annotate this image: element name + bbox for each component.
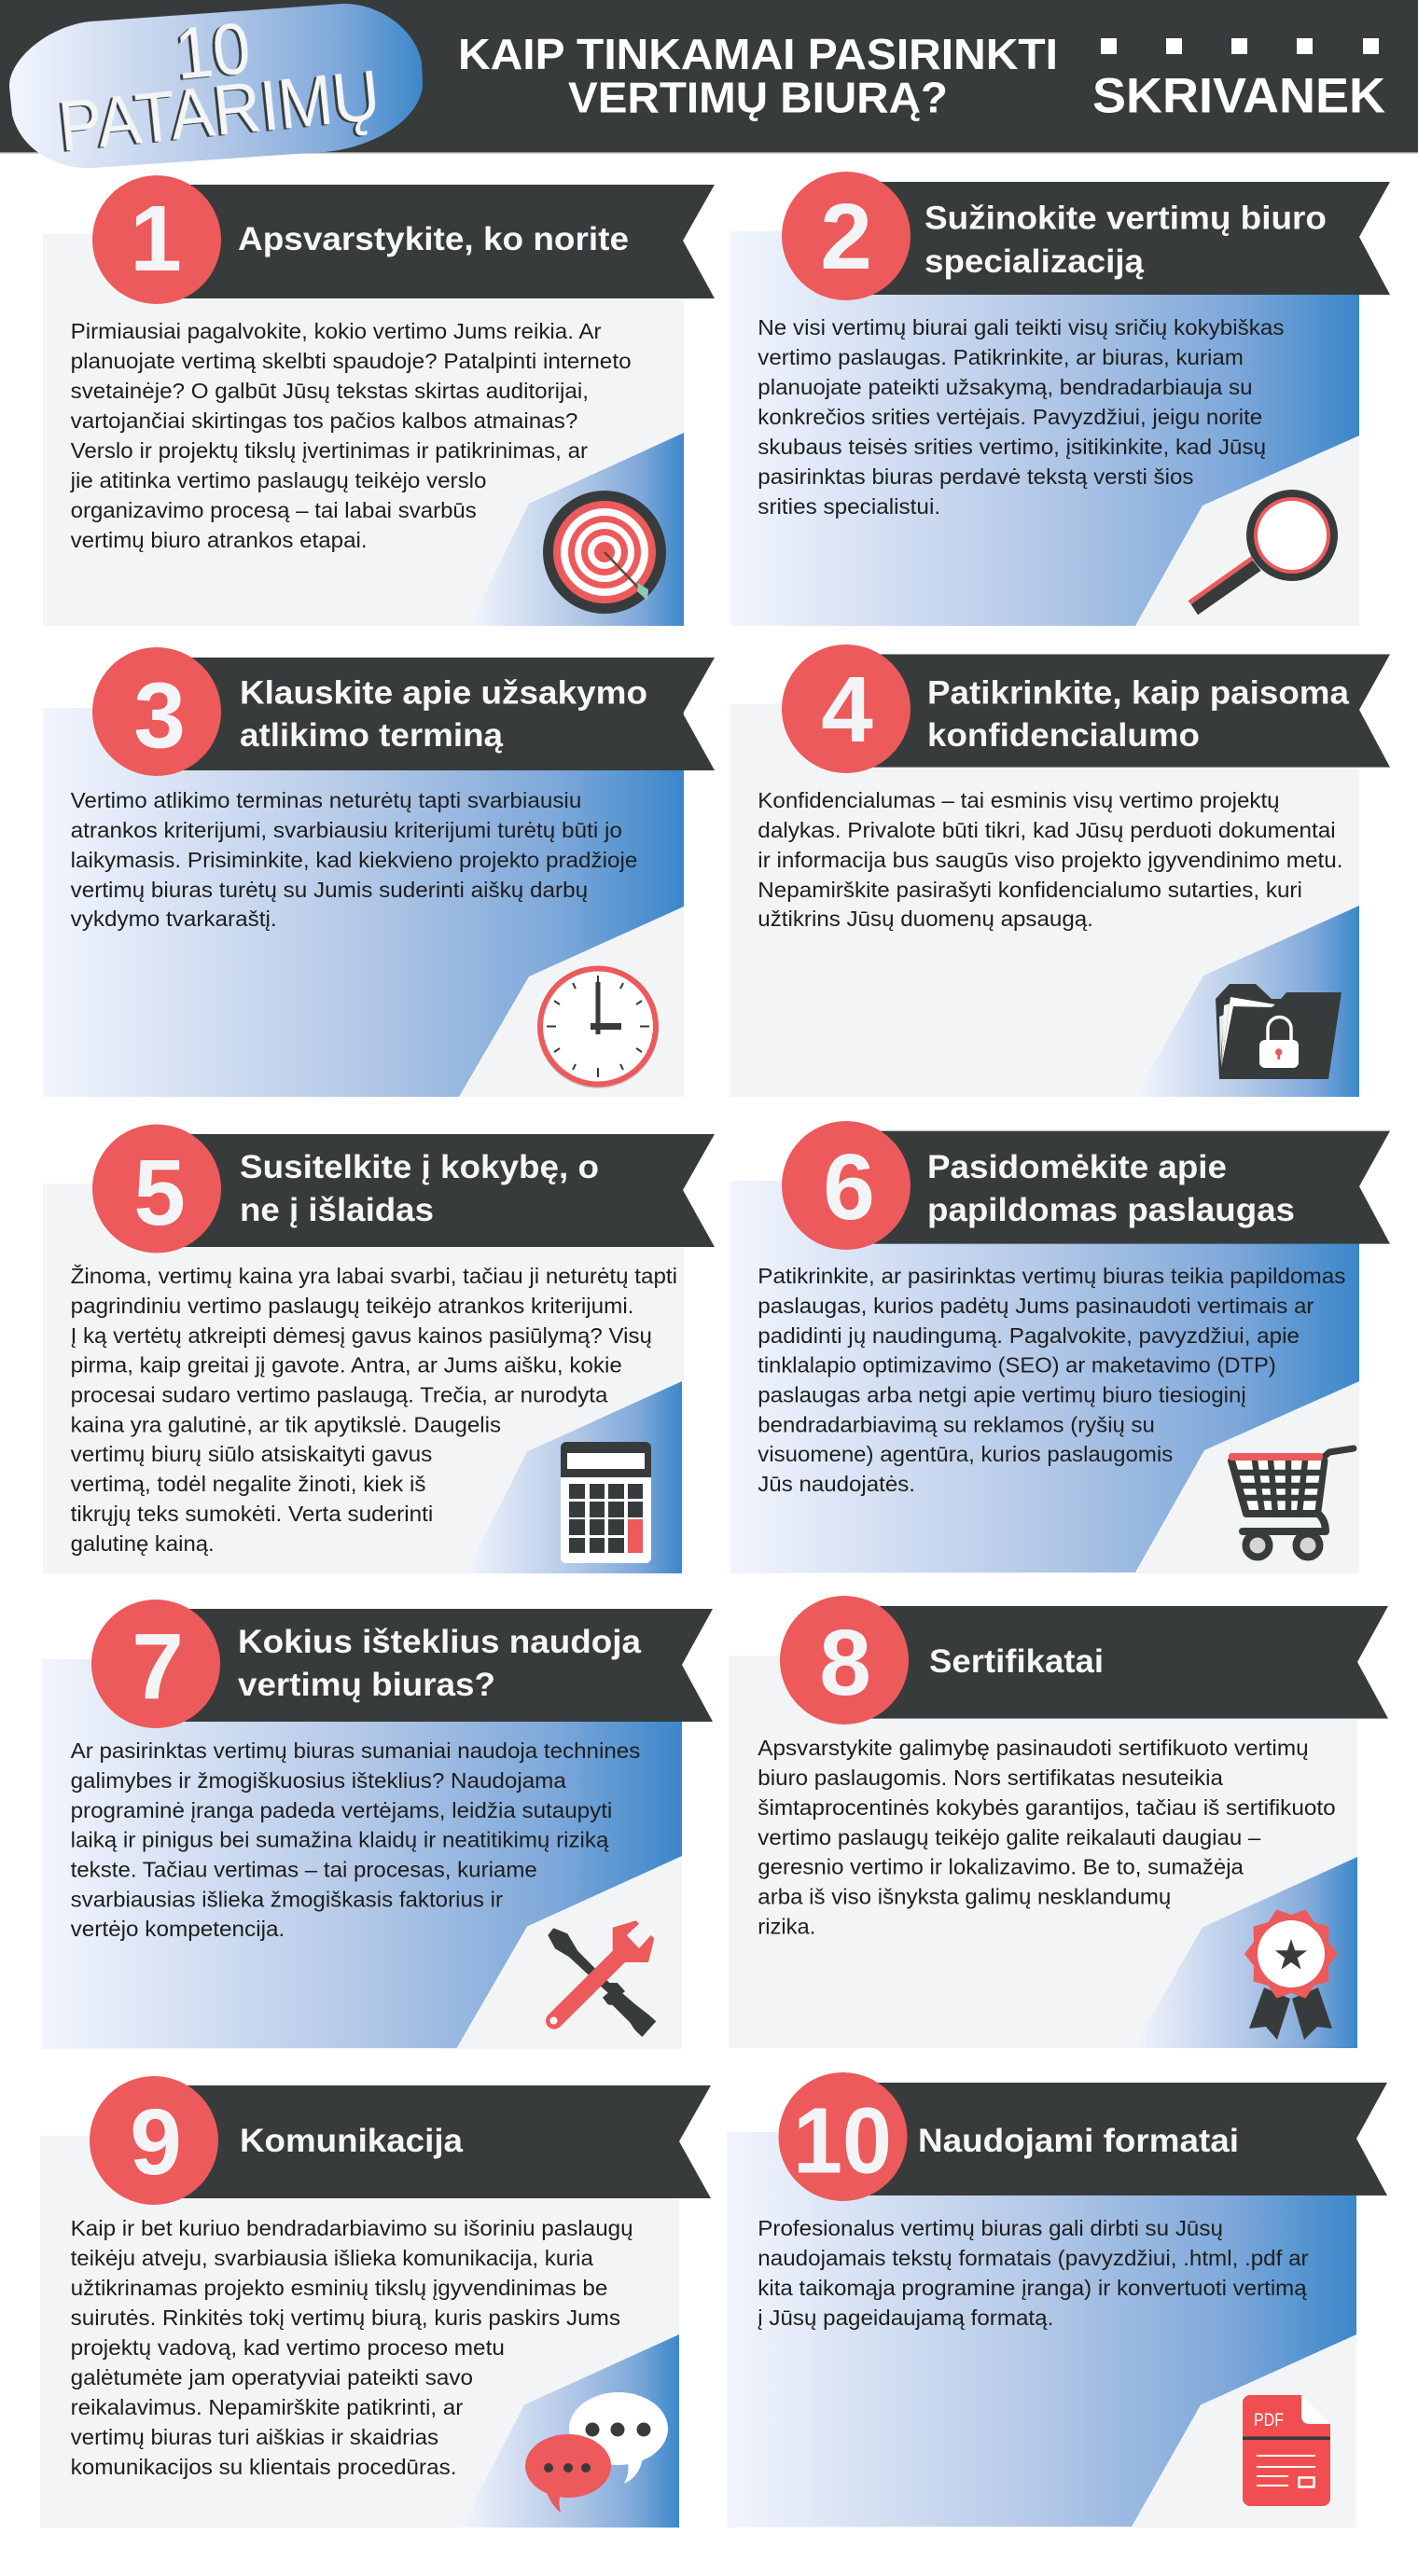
number 2: 2 bbox=[820, 185, 872, 289]
number 6: 6 bbox=[823, 1135, 875, 1240]
text block 9: teikėju atveju, svarbiausia išlieka komunikacija, kuria bbox=[71, 2246, 593, 2270]
text block 3: vertimų biuras turėtų su Jumis suderinti aiškų darbų bbox=[71, 878, 588, 902]
text block 10: kita taikomąja programine įranga) ir konvertuoti vertimą bbox=[758, 2276, 1307, 2300]
text block 6: Patikrinkite, ar pasirinktas vertimų biuras teikia papildomas bbox=[758, 1264, 1345, 1288]
heading 6: Pasidomėkite apie bbox=[927, 1149, 1227, 1185]
heading 10: Naudojami formatai bbox=[918, 2123, 1239, 2159]
text block 1: svetainėje? O galbūt Jūsų tekstas skirtas auditorijai, bbox=[71, 379, 589, 403]
number 7: 7 bbox=[132, 1614, 184, 1719]
title: VERTIMŲ BIURĄ? bbox=[568, 73, 948, 121]
heading 7: vertimų biuras? bbox=[238, 1667, 495, 1703]
text block 9: reikalavimus. Nepamirškite patikrinti, ar bbox=[71, 2395, 464, 2419]
text block 5: kaina yra galutinė, ar tik apytikslė. Daugelis bbox=[71, 1412, 501, 1436]
logo: Skrivanek: SKRIVANEK bbox=[1092, 69, 1385, 123]
heading 2 bbox=[924, 200, 1327, 280]
text block 7: tekste. Tačiau vertimas – tai procesas, kuriame bbox=[71, 1858, 537, 1882]
icon: shopping cart bbox=[1229, 1448, 1354, 1558]
panel 8 bbox=[729, 1596, 1388, 2048]
text block 9: Kaip ir bet kuriuo bendradarbiavimo su išoriniu paslaugų bbox=[71, 2216, 633, 2240]
text block 7: vertėjo kompetencija. bbox=[71, 1917, 285, 1941]
text block 9 bbox=[71, 2216, 633, 2479]
text block 1: Pirmiausiai pagalvokite, kokio vertimo Jums reikia. Ar bbox=[71, 319, 602, 343]
icon: chat bubbles bbox=[525, 2392, 668, 2513]
panel 2 bbox=[730, 172, 1390, 626]
text block 8: šimtaprocentinės kokybės garantijos, tačiau iš sertifikuoto bbox=[758, 1795, 1336, 1820]
text block 8: arba iš viso išnyksta galimų nesklandumų bbox=[758, 1884, 1171, 1908]
text block 3 bbox=[71, 788, 637, 931]
title bbox=[458, 30, 1058, 121]
heading 2: Sužinokite vertimų biuro bbox=[924, 200, 1327, 237]
text block 9: suirutės. Rinkitės tokį vertimų biurą, kuris paskirs Jums bbox=[71, 2306, 620, 2330]
text block 5: pagrindiniu vertimo paslaugų teikėjo atrankos kriterijumi. bbox=[71, 1294, 634, 1318]
text block 5: vertimą, todėl negalite žinoti, kiek iš bbox=[71, 1472, 426, 1496]
text block 5: pirma, kaip greitai jį gavote. Antra, ar Jums aišku, kokie bbox=[71, 1352, 622, 1377]
text block 3: atrankos kriterijumi, svarbiausiu kriterijumi turėtų būti jo bbox=[71, 818, 622, 842]
icon: PDF document: PDF bbox=[1254, 2411, 1284, 2431]
number 1: 1 bbox=[130, 187, 182, 291]
text block 8 bbox=[758, 1736, 1336, 1938]
icon: locked folder bbox=[1216, 984, 1342, 1079]
text block 6: paslaugas, kurios padėtų Jums pasinaudoti vertimais ar bbox=[758, 1294, 1314, 1318]
text block 6: Jūs naudojatės. bbox=[758, 1472, 915, 1496]
text block 6: tinklalapio optimizavimo (SEO) ar maketavimo (DTP) bbox=[758, 1352, 1276, 1377]
panel 4 bbox=[730, 644, 1390, 1097]
text block 4: užtikrins Jūsų duomenų apsaugą. bbox=[758, 907, 1093, 931]
heading 5: ne į išlaidas bbox=[240, 1192, 434, 1228]
text block 7: laiką ir pinigus bei sumažina klaidų ir neatitikimų riziką bbox=[71, 1828, 609, 1852]
text block 1: vartojančiai skirtingas tos pačios kalbos atmainas? bbox=[71, 409, 577, 433]
text block 1: vertimų biuro atrankos etapai. bbox=[71, 528, 368, 552]
heading 7: Kokius išteklius naudoja bbox=[238, 1624, 642, 1660]
text block 4: Konfidencialumas – tai esminis visų vertimo projektų bbox=[758, 788, 1280, 812]
badge: 10 patarimų bbox=[9, 4, 423, 168]
heading 4: konfidencialumo bbox=[927, 717, 1200, 754]
panel 1 bbox=[43, 175, 715, 626]
header band bbox=[0, 0, 1418, 153]
text block 10: Profesionalus vertimų biuras gali dirbti su Jūsų bbox=[758, 2216, 1223, 2240]
heading 2: specializaciją bbox=[924, 243, 1145, 280]
badge: 10 patarimų: 10 bbox=[172, 6, 254, 95]
text block 9: vertimų biuras turi aiškias ir skaidrias bbox=[71, 2425, 438, 2449]
text block 4: dalykas. Privalote būti tikri, kad Jūsų perduoti dokumentai bbox=[758, 818, 1336, 842]
heading 9: Komunikacija bbox=[240, 2123, 464, 2159]
text block 6: visuomene) agentūra, kurios paslaugomis bbox=[758, 1442, 1173, 1466]
panel 5 bbox=[43, 1125, 715, 1573]
text block 7: Ar pasirinktas vertimų biuras sumaniai naudoja technines bbox=[71, 1738, 640, 1763]
text block 6 bbox=[758, 1264, 1345, 1496]
heading 4 bbox=[927, 675, 1350, 754]
text block 4 bbox=[758, 788, 1343, 931]
text block 1: planuojate vertimą skelbti spaudoje? Patalpinti interneto bbox=[71, 349, 632, 373]
heading 7 bbox=[238, 1624, 642, 1703]
number 4: 4 bbox=[821, 658, 873, 762]
text block 2: vertimo paslaugas. Patikrinkite, ar biuras, kuriam bbox=[758, 345, 1244, 369]
text block 4: Nepamirškite pasirašyti konfidencialumo sutarties, kuri bbox=[758, 878, 1302, 902]
text block 3: laikymasis. Prisiminkite, kad kiekvieno projekto pradžioje bbox=[71, 848, 637, 872]
text block 2: pasirinktas biuras perdavė tekstą versti šios bbox=[758, 464, 1194, 489]
heading 3: atlikimo terminą bbox=[240, 717, 504, 754]
icon: clock bbox=[537, 966, 659, 1088]
number 5: 5 bbox=[133, 1141, 186, 1245]
panel 10 bbox=[727, 2072, 1387, 2528]
text block 8: vertimo paslaugų teikėjo galite reikalauti daugiau – bbox=[758, 1825, 1261, 1849]
text block 8: biuro paslaugomis. Nors sertifikatas nesuteikia bbox=[758, 1766, 1223, 1790]
text block 3: vykdymo tvarkaraštį. bbox=[71, 907, 277, 931]
badge: 10 patarimų: PATARIMŲ bbox=[55, 55, 383, 167]
text block 5: tikrųjų teks sumokėti. Verta suderinti bbox=[71, 1502, 433, 1526]
panel 7 bbox=[41, 1600, 713, 2049]
panel 3 bbox=[43, 647, 715, 1097]
text block 7 bbox=[71, 1738, 640, 1941]
number 8: 8 bbox=[819, 1611, 871, 1715]
text block 7: programinė įranga padeda vertėjams, leidžia sutaupyti bbox=[71, 1798, 612, 1822]
text block 1: jie atitinka vertimo paslaugų teikėjo verslo bbox=[70, 468, 486, 492]
text block 2: Ne visi vertimų biurai gali teikti visų sričių kokybiškas bbox=[758, 315, 1284, 339]
title: KAIP TINKAMAI PASIRINKTI bbox=[458, 30, 1058, 78]
icon: screwdriver and wrench bbox=[546, 1920, 656, 2037]
text block 1: organizavimo procesą – tai labai svarbūs bbox=[71, 498, 477, 522]
icon: calculator bbox=[561, 1442, 651, 1563]
heading 6 bbox=[927, 1149, 1295, 1228]
icon: award rosette bbox=[1244, 1909, 1338, 2040]
text block 6: padidinti jų naudingumą. Pagalvokite, pavyzdžiui, apie bbox=[758, 1323, 1300, 1348]
text block 5: vertimų biurų siūlo atsiskaityti gavus bbox=[71, 1442, 432, 1466]
text block 7: galimybes ir žmogiškuosius išteklius? Naudojama bbox=[71, 1768, 566, 1793]
text block 10 bbox=[758, 2216, 1309, 2330]
heading 3 bbox=[240, 675, 647, 754]
icon: PDF document bbox=[1243, 2395, 1330, 2506]
text block 9: užtikrinamas projekto esminių tikslų įgyvendinimas be bbox=[71, 2276, 607, 2300]
icon: magnifier bbox=[1188, 490, 1338, 615]
heading 5: Susitelkite į kokybę, o bbox=[240, 1149, 599, 1185]
text block 5: Į ką vertėtų atkreipti dėmesį gavus kainos pasiūlymą? Visų bbox=[71, 1323, 652, 1348]
text block 6: paslaugas arba netgi apie vertimų biuro tiesioginį bbox=[758, 1382, 1246, 1406]
text block 7: svarbiausias išlieka žmogiškasis faktorius ir bbox=[71, 1888, 503, 1912]
heading 5 bbox=[240, 1149, 599, 1228]
text block 8: geresnio vertimo ir lokalizavimo. Be to, sumažėja bbox=[758, 1854, 1244, 1878]
text block 10: į Jūsų pageidaujamą formatą. bbox=[758, 2306, 1053, 2330]
number 10: 10 bbox=[793, 2089, 892, 2194]
text block 1 bbox=[70, 319, 632, 552]
panel 6 bbox=[730, 1121, 1390, 1573]
heading 1: Apsvarstykite, ko norite bbox=[238, 221, 629, 257]
logo: Skrivanek bbox=[1092, 38, 1385, 123]
text block 4: ir informacija bus saugūs viso projekto įgyvendinimo metu. bbox=[758, 848, 1343, 872]
heading 8: Sertifikatai bbox=[929, 1643, 1104, 1680]
number 9: 9 bbox=[130, 2090, 182, 2195]
text block 9: projektų vadovą, kad vertimo proceso metu bbox=[71, 2335, 505, 2360]
heading 3: Klauskite apie užsakymo bbox=[240, 675, 647, 712]
panel 9 bbox=[40, 2076, 711, 2528]
text block 2 bbox=[758, 315, 1284, 519]
text block 2: konkrečios srities vertėjais. Pavyzdžiui, jeigu norite bbox=[758, 405, 1262, 429]
number 3: 3 bbox=[133, 664, 186, 769]
text block 5: galutinę kainą. bbox=[71, 1531, 215, 1556]
heading 4: Patikrinkite, kaip paisoma bbox=[927, 675, 1350, 712]
text block 2: planuojate pateikti užsakymą, bendradarbiauja su bbox=[758, 375, 1252, 399]
icon: target bbox=[543, 491, 666, 614]
text block 2: srities specialistui. bbox=[758, 494, 940, 519]
text block 5 bbox=[71, 1264, 677, 1556]
text block 8: rizika. bbox=[758, 1914, 815, 1938]
text block 9: galėtumėte jam operatyviai pateikti savo bbox=[71, 2365, 473, 2389]
text block 5: Žinoma, vertimų kaina yra labai svarbi, tačiau ji neturėtų tapti bbox=[71, 1264, 677, 1288]
text block 1: Verslo ir projektų tikslų įvertinimas ir patikrinimas, ar bbox=[71, 438, 588, 463]
text block 9: komunikacijos su klientais procedūras. bbox=[71, 2455, 456, 2479]
text block 5: procesai sudaro vertimo paslaugą. Trečia, ar nurodyta bbox=[71, 1382, 608, 1406]
text block 10: naudojamais tekstų formatais (pavyzdžiui, .html, .pdf ar bbox=[758, 2246, 1309, 2270]
text block 8: Apsvarstykite galimybę pasinaudoti sertifikuoto vertimų bbox=[758, 1736, 1309, 1760]
text block 2: skubaus teisės srities vertimo, įsitikinkite, kad Jūsų bbox=[758, 435, 1266, 459]
text block 6: bendradarbiavimą su reklamos (ryšių su bbox=[758, 1412, 1155, 1436]
text block 3: Vertimo atlikimo terminas neturėtų tapti svarbiausiu bbox=[71, 788, 581, 812]
heading 6: papildomas paslaugas bbox=[927, 1192, 1295, 1228]
